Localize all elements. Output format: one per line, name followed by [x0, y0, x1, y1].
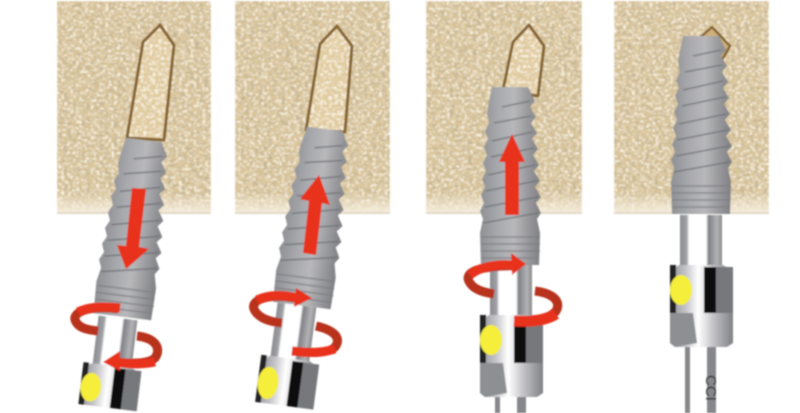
drilled hole 3 [503, 25, 544, 96]
panel 3: implant backed out [426, 1, 582, 413]
bone block 1 [57, 1, 211, 214]
implant 3 [480, 87, 541, 265]
bone block 4 [614, 1, 769, 214]
rotation arrow 3 [468, 253, 558, 321]
panel 2: implant being driven in further [235, 1, 390, 410]
driver 2 [255, 301, 327, 410]
drilled hole tip 4 [695, 27, 730, 60]
driver shaft 4 [685, 347, 716, 413]
drilled hole 2 [306, 26, 352, 132]
red up arrow 2 [300, 175, 330, 255]
driver 3 [480, 265, 543, 397]
bone block 2 [235, 1, 390, 214]
driver 4 [670, 215, 733, 347]
bone block 3 [426, 1, 582, 214]
panel 1: implant being driven in [57, 1, 211, 411]
drilled hole 1 [127, 25, 174, 140]
shaft marking: CCI [702, 375, 719, 401]
driver 1 [78, 314, 148, 411]
panel 4: implant fully seated [614, 1, 769, 413]
red down arrow 1 [117, 188, 149, 269]
implant 2 [272, 125, 356, 310]
red up arrow 3 [499, 134, 525, 215]
rotation arrow 2 [254, 288, 338, 352]
implant 1 [93, 136, 175, 320]
rotation arrow 1 [75, 307, 158, 371]
implant 4 [671, 36, 732, 214]
driver shaft 3 [495, 397, 526, 413]
